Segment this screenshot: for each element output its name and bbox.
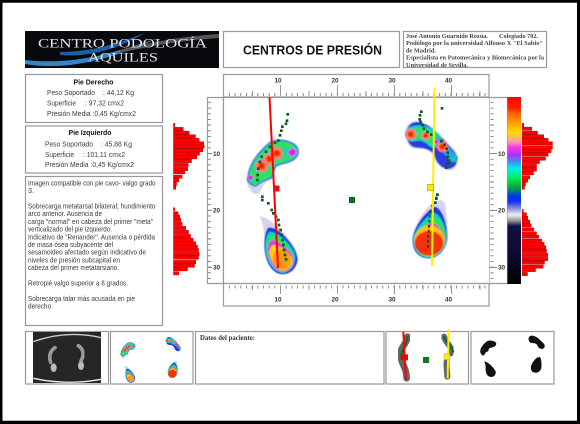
panel: pie izquierdo: Presión Media :0,45 Kg/cmx2 <box>45 160 134 169</box>
author details: José Antonio Guarnido Rozúa. <box>406 33 488 40</box>
author details: Colegiado 702. <box>499 33 538 40</box>
bottom ruler: 30 <box>388 296 396 304</box>
logo banner: CENTRO PODOLOGÍA <box>38 36 207 50</box>
panel: pie izquierdo: Pie Izquierdo <box>68 128 112 137</box>
right ruler: 10 <box>498 151 506 158</box>
panel: clinical notes: 3. <box>28 186 34 195</box>
panel: clinical notes: Sobrecarga metatarsal bilateral; hundimiento <box>28 202 156 210</box>
right ruler: 30 <box>498 264 506 272</box>
top ruler: 10 <box>274 78 282 84</box>
panel: patient data <box>196 332 384 384</box>
top ruler: 40 <box>445 78 452 84</box>
thumbnail: contact silhouettes <box>471 332 554 384</box>
author details: Podólogo por la universidad Alfonso X "El Sabio" <box>406 40 543 47</box>
top ruler: 30 <box>388 78 396 84</box>
panel: clinical notes: carga "normal" en cabeza del primer "meta" <box>28 217 153 226</box>
left ruler: 10 <box>213 151 221 158</box>
panel: pie derecho: : 97,32 cmx2 <box>85 98 124 108</box>
panel: pie izquierdo: Superficie <box>45 150 74 159</box>
panel: pie izquierdo <box>26 126 162 173</box>
right histograms <box>522 125 553 274</box>
panel: clinical notes: Indicativo de "Renander". Ausencia o pérdida <box>28 232 155 241</box>
bottom ruler: 10 <box>274 296 282 304</box>
panel: pie derecho: : 44,12 Kg <box>103 88 134 97</box>
thumbnail: footprint scan <box>26 332 108 384</box>
left histograms <box>173 125 204 273</box>
bottom ruler: 40 <box>445 296 452 304</box>
top ruler: 20 <box>331 78 339 84</box>
top ruler <box>224 74 489 97</box>
panel: clinical notes: arco anterior. Ausencia de <box>28 209 102 218</box>
panel: clinical notes: Imagen compatible con pie cavo- valgo grado <box>28 178 156 188</box>
author details: Universidad de Sevilla. <box>406 62 468 69</box>
left ruler <box>208 98 224 284</box>
pressure map: four feet <box>247 121 458 274</box>
left ruler: 30 <box>213 264 221 272</box>
logo banner <box>25 31 219 68</box>
panel: clinical notes: verticalizado del pie izquierdo. <box>28 225 112 234</box>
panel: pie izquierdo: : 101,11 cmx2 <box>83 150 125 159</box>
main pressure plot <box>224 98 490 284</box>
centre of pressure chains <box>256 107 450 261</box>
panel: pie derecho: Superficie <box>47 98 76 108</box>
panel: clinical notes: de masa ósea subyacente del <box>28 240 113 249</box>
right ruler <box>490 98 508 284</box>
panel: clinical notes: Sobrecarga talar más acusada en pie <box>28 294 135 303</box>
colour scale bar <box>508 97 521 284</box>
panel: pie derecho: Presión Media :0,45 Kg/cmx2 <box>47 109 136 118</box>
bottom ruler <box>224 284 489 306</box>
panel: pie izquierdo: : 45,88 Kg <box>101 140 132 148</box>
thumbnail: pressure map <box>110 332 193 384</box>
title: CENTROS DE PRESIÓN <box>243 42 382 58</box>
right ruler: 20 <box>498 208 506 214</box>
panel: patient data: Datos del paciente: <box>200 334 255 342</box>
logo banner: AQUILES <box>88 50 158 64</box>
right foot axis line and centre marker <box>428 88 434 266</box>
global centre marker <box>349 197 355 203</box>
panel: clinical notes: cabeza del primer metatarsiano. <box>28 263 119 272</box>
panel: clinical notes: Retropié valgo superior a 8 grados. <box>28 278 128 288</box>
panel: pie izquierdo: Peso Soportado <box>45 140 93 148</box>
panel: pie derecho: Peso Soportado <box>47 88 95 97</box>
panel: pie derecho: Pie Derecho <box>74 78 114 86</box>
bottom ruler: 20 <box>331 296 339 304</box>
panel: clinical notes <box>26 176 162 326</box>
panel: pie derecho <box>26 74 162 122</box>
author details <box>404 32 546 69</box>
panel: clinical notes: niveles de presión subcapital en <box>28 255 120 264</box>
thumbnail: centres of pressure <box>386 329 468 384</box>
panel: clinical notes: derecho. <box>28 302 53 311</box>
panel: clinical notes: sesamoideo afectado según indicativo de <box>28 248 146 257</box>
title <box>224 32 400 68</box>
left foot axis line and centre marker <box>270 97 280 268</box>
author details: de Madrid. <box>406 47 436 54</box>
left ruler: 20 <box>213 208 221 214</box>
author details: Especialista en Patomecánica y Biomecánica por la <box>406 55 545 62</box>
